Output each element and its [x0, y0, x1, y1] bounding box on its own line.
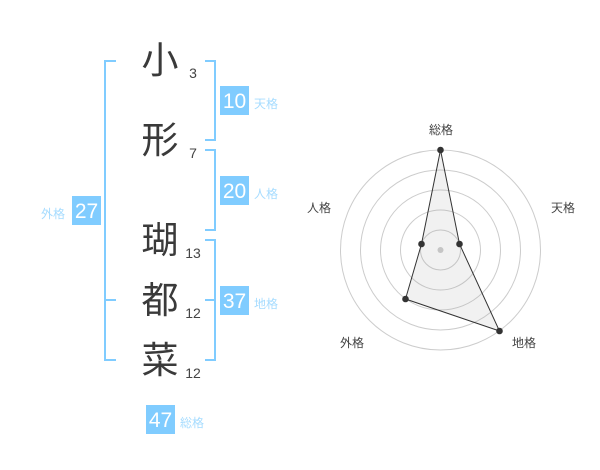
label: 人格: 人格 — [254, 187, 278, 201]
score box: 外格 27 — [72, 196, 101, 225]
stroke count: 3: 3 — [189, 65, 197, 81]
axis label: 地格: 地格 — [512, 335, 536, 350]
axis label: 天格: 天格 — [551, 200, 575, 215]
score box: 総格 47 — [146, 405, 175, 434]
score box: 人格 20 — [220, 176, 249, 205]
axis label: 人格: 人格 — [307, 200, 331, 215]
score box: 外格 27: 27 — [75, 200, 98, 223]
stroke count: 12: 12 — [185, 305, 201, 321]
score box: 地格 37 — [220, 286, 249, 315]
data polygon — [402, 147, 503, 334]
kanji: 都: 都 — [142, 280, 178, 321]
label: 外格: 外格 — [41, 207, 65, 221]
label: 天格: 天格 — [254, 97, 278, 111]
stroke count: 7: 7 — [189, 145, 197, 161]
kanji: 形: 形 — [142, 120, 178, 161]
score box: 天格 10: 10 — [223, 90, 246, 113]
label: 地格: 地格 — [254, 297, 278, 311]
kanji: 菜: 菜 — [142, 340, 178, 381]
axis label: 外格: 外格 — [340, 335, 364, 350]
kanji: 瑚: 瑚 — [142, 220, 178, 261]
stroke count: 12: 12 — [185, 365, 201, 381]
center point — [438, 247, 444, 253]
score box: 天格 10 — [220, 86, 249, 115]
stroke count: 13: 13 — [185, 245, 201, 261]
axis label: 総格: 総格 — [429, 122, 453, 137]
kanji: 小: 小 — [142, 40, 178, 81]
score box: 地格 37: 37 — [223, 290, 246, 313]
score box: 総格 47: 47 — [149, 409, 172, 432]
label: 総格: 総格 — [180, 416, 204, 430]
score box: 人格 20: 20 — [223, 180, 246, 203]
